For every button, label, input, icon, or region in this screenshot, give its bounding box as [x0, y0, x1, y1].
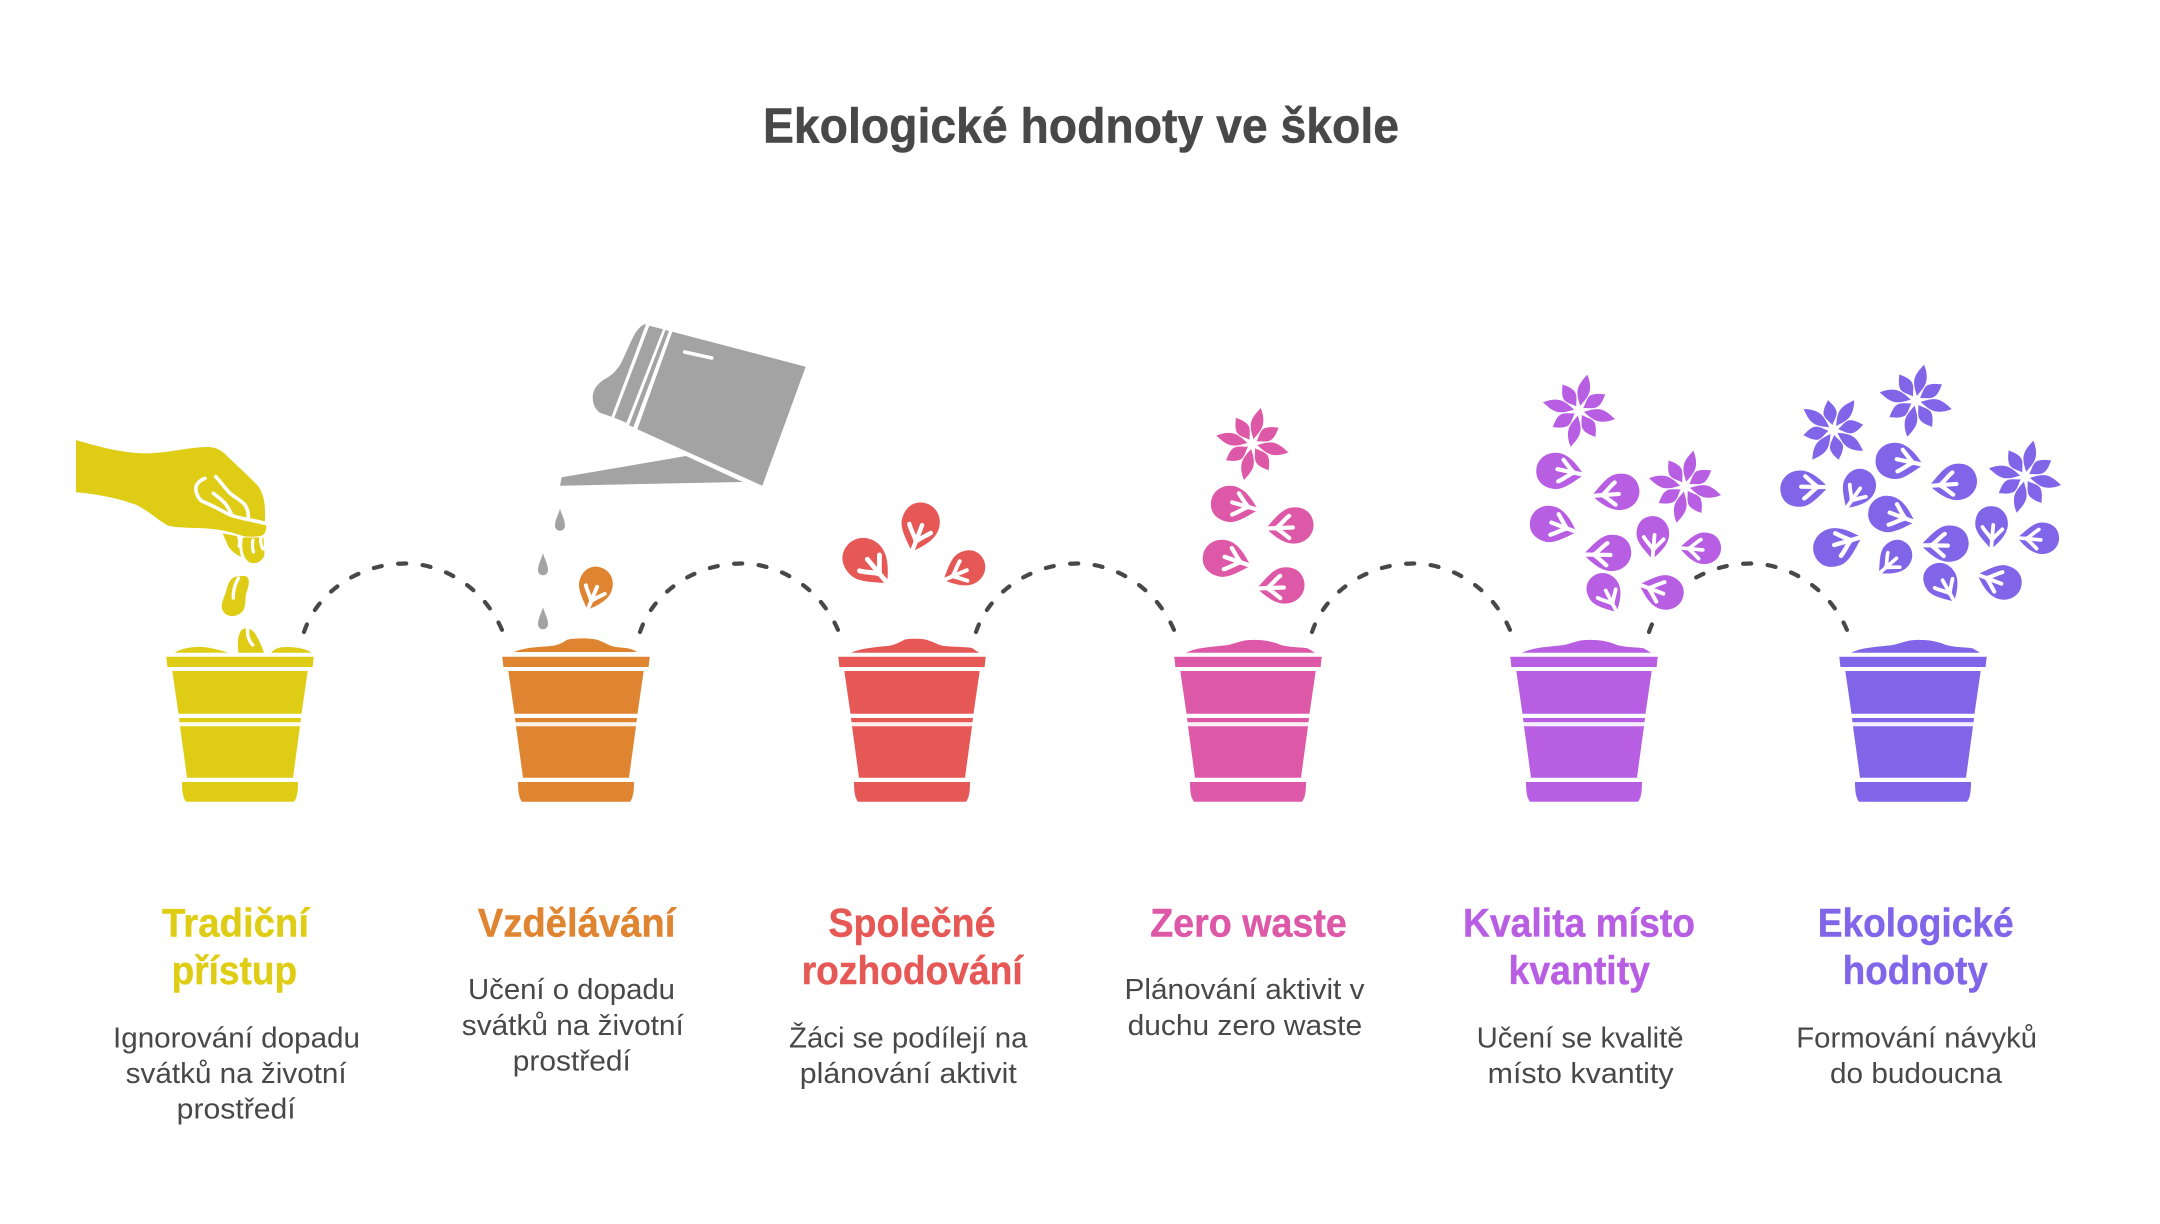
text block: Ekologické hodnoty [1796, 902, 2037, 1090]
text block: Ekologické hodnoty: do budoucna [1830, 1058, 2002, 1090]
icon: orange sprout leaf [572, 563, 617, 617]
text block: Tradiční přístup [113, 902, 360, 1126]
icon: red leaves [834, 498, 992, 599]
text block: Ekologické hodnoty: hodnoty [1843, 949, 1988, 993]
icon: pink plant [1199, 407, 1316, 608]
text block: Zero waste: Plánování aktivit v [1124, 974, 1365, 1006]
text block: Kvalita místo kvantity: místo kvantity [1488, 1058, 1674, 1090]
text block: Zero waste: Zero waste [1150, 902, 1347, 946]
text block: Společné rozhodování: Společné [828, 902, 996, 946]
text block: Tradiční přístup: prostředí [177, 1094, 296, 1126]
text block: Kvalita místo kvantity: Učení se kvalitě [1477, 1023, 1684, 1055]
dashed arrows between pots [304, 564, 1847, 632]
text block: Vzdělávání: Vzdělávání [478, 902, 677, 946]
icon: pink pot [1174, 640, 1322, 802]
text block: Zero waste: duchu zero waste [1128, 1010, 1362, 1042]
text block: Tradiční přístup: svátků na životní [126, 1058, 347, 1090]
title: Ekologické hodnoty ve škole [763, 98, 1399, 153]
text block: Společné rozhodování: plánování aktivit [800, 1058, 1017, 1090]
text block: Společné rozhodování [789, 902, 1028, 1090]
text block: Kvalita místo kvantity [1463, 902, 1695, 1090]
text block: Vzdělávání: prostředí [513, 1046, 631, 1078]
icon: water drops [538, 508, 565, 629]
text block: Vzdělávání: Učení o dopadu [468, 974, 675, 1006]
text block: Tradiční přístup: přístup [172, 949, 297, 993]
text block: Vzdělávání: svátků na životní [462, 1010, 684, 1042]
seeds held under the hand [223, 534, 264, 563]
icon: violet pot [1839, 640, 1987, 802]
icon: red pot [838, 639, 986, 802]
icon: orange pot [502, 638, 650, 802]
icon: purple pot [1510, 640, 1658, 802]
falling seed [222, 576, 249, 616]
icon: violet plant [1779, 363, 2062, 612]
icon: yellow pot [166, 647, 314, 802]
icon: hand dropping seeds [76, 440, 266, 653]
icon: watering can [560, 324, 806, 486]
seed landing in the pot [238, 628, 264, 653]
text block: Tradiční přístup: Tradiční [162, 902, 311, 946]
text block: Vzdělávání [462, 902, 684, 1078]
text block: Tradiční přístup: Ignorování dopadu [113, 1023, 360, 1055]
text block: Kvalita místo kvantity: Kvalita místo [1463, 902, 1695, 946]
text block: Ekologické hodnoty: Ekologické [1818, 902, 2014, 946]
text block: Společné rozhodování: Žáci se podílejí na [789, 1023, 1028, 1055]
text block: Společné rozhodování: rozhodování [802, 949, 1024, 993]
text block: Zero waste [1124, 902, 1365, 1042]
text block: Kvalita místo kvantity: kvantity [1508, 949, 1651, 993]
hand [76, 440, 266, 537]
icon: purple plant [1526, 373, 1722, 622]
text block: Ekologické hodnoty: Formování návyků [1796, 1023, 2037, 1055]
